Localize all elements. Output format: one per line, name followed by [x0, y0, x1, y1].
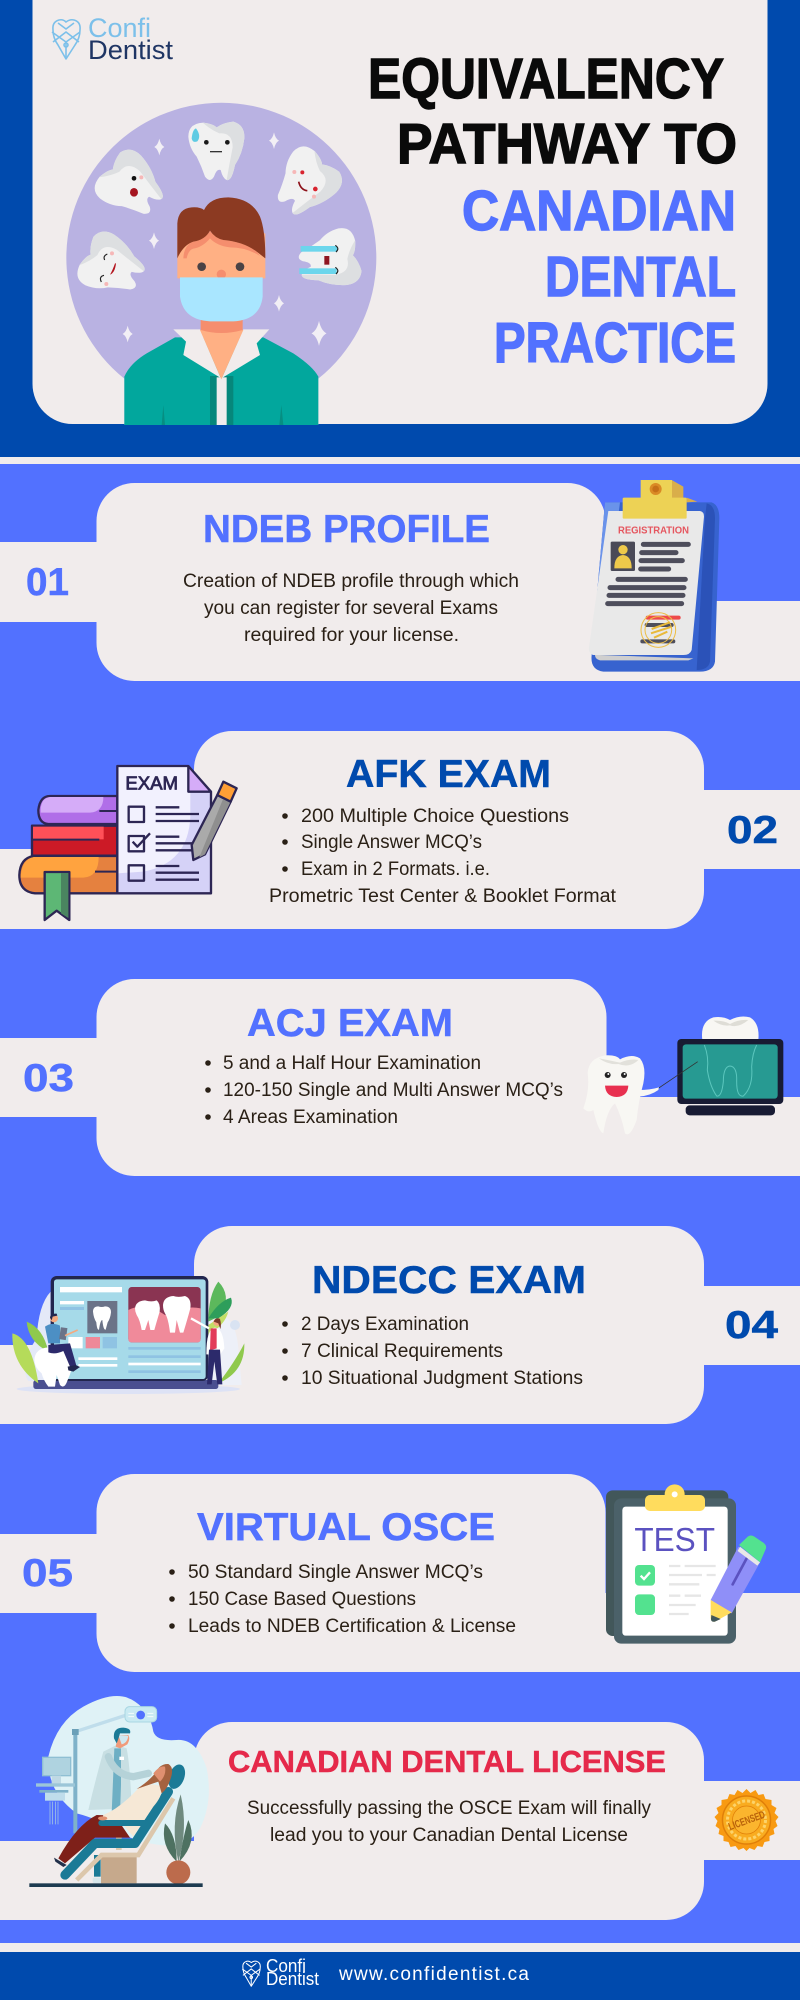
heading: NDEB PROFILE [203, 508, 490, 551]
bullet list: Exam in 2 Formats. i.e. [301, 859, 490, 880]
panel: step 05 virtual OSCE [0, 1474, 800, 1672]
title [368, 47, 737, 375]
number: 04 [725, 1304, 778, 1347]
bullet list: 200 Multiple Choice Questions [301, 806, 569, 827]
bullet list: 10 Situational Judgment Stations [301, 1368, 583, 1389]
logo: Confi [266, 1956, 306, 1976]
title: EQUIVALENCY [368, 47, 724, 111]
bullet list: 4 Areas Examination [223, 1107, 398, 1128]
bullet list [169, 1562, 516, 1637]
panel: step 02 AFK exam [0, 731, 800, 929]
bullet list: Leads to NDEB Certification & License [188, 1616, 516, 1637]
heading: CANADIAN DENTAL LICENSE [228, 1744, 666, 1779]
icon: test clipboard with pencil: TEST [634, 1521, 715, 1558]
icon: tooth pointing at x-ray monitor [583, 1016, 783, 1134]
title: PATHWAY TO [397, 112, 737, 176]
footer [0, 1952, 800, 2000]
bullet list: 50 Standard Single Answer MCQ’s [188, 1562, 483, 1583]
background: pathway area [0, 464, 800, 1943]
number: 03 [23, 1057, 74, 1100]
panel: step 01 NDEB profile [0, 480, 800, 681]
heading: ACJ EXAM [247, 1002, 453, 1045]
panel: step 04 NDECC exam [0, 1226, 800, 1424]
description: required for your license. [244, 625, 459, 646]
bullet list: Single Answer MCQ’s [301, 832, 482, 853]
title: CANADIAN [462, 179, 736, 243]
number: 02 [727, 809, 778, 852]
icon: test clipboard with pencil [606, 1484, 766, 1644]
bullet list [269, 806, 617, 907]
panel: header [32, 0, 768, 425]
description [183, 571, 519, 646]
heading: NDECC EXAM [312, 1259, 586, 1302]
bullet list: 7 Clinical Requirements [301, 1341, 503, 1362]
description [247, 1798, 651, 1846]
description: Creation of NDEB profile through which [183, 571, 519, 592]
logo: Confi [88, 13, 151, 43]
icon: licensed seal [714, 1789, 778, 1851]
icon: exam paper with books and pencil: EXAM [125, 772, 178, 793]
icon: licensed seal: LICENSED [727, 1809, 767, 1833]
logo [242, 1956, 319, 1989]
illustration: dentist treating a patient [29, 1696, 209, 1887]
bullet list: 120-150 Single and Multi Answer MCQ’s [223, 1080, 563, 1101]
description: Successfully passing the OSCE Exam will finally [247, 1798, 651, 1819]
bullet list: Prometric Test Center & Booklet Format [269, 886, 617, 907]
logo: Dentist [88, 35, 173, 65]
website: www.confidentist.ca [338, 1964, 529, 1985]
heading: AFK EXAM [346, 753, 551, 796]
separator strip [0, 457, 800, 464]
logo: Dentist [266, 1969, 319, 1989]
icon: registration clipboard: REGISTRATION [618, 525, 689, 536]
number: 01 [26, 561, 69, 604]
icon: exam paper with books and pencil [19, 766, 237, 920]
title: DENTAL [545, 245, 736, 309]
background: header band [0, 0, 800, 457]
bullet list: 2 Days Examination [301, 1314, 469, 1335]
description: you can register for several Exams [204, 598, 498, 619]
description: lead you to your Canadian Dental License [270, 1825, 628, 1846]
heading: VIRTUAL OSCE [197, 1506, 495, 1549]
panel: step 03 ACJ exam [0, 979, 800, 1176]
panel: step 06 Canadian dental license [0, 1696, 800, 1920]
title: PRACTICE [494, 311, 736, 375]
bullet list: 150 Case Based Questions [188, 1589, 416, 1610]
separator strip [0, 1943, 800, 1952]
logo [52, 13, 173, 65]
illustration: masked dentist with worried teeth [66, 103, 376, 425]
bullet list [282, 1314, 583, 1389]
bullet list [205, 1053, 563, 1128]
number: 05 [22, 1552, 73, 1595]
bullet list: 5 and a Half Hour Examination [223, 1053, 481, 1074]
icon: registration clipboard [589, 480, 719, 672]
illustration: laptop with dental x-ray and people [12, 1276, 244, 1394]
